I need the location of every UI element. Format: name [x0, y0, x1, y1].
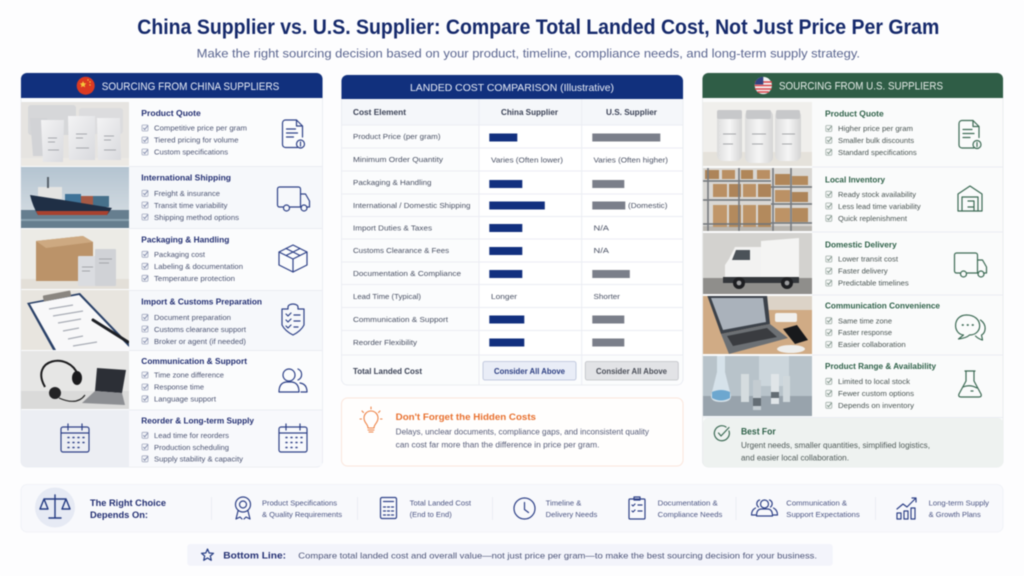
factor: timeline: Timeline &: [546, 498, 582, 508]
photo: laptop on desk: [702, 295, 813, 355]
checklist: range: [826, 377, 914, 410]
heading: right choice: The Right Choice: [90, 498, 166, 508]
factor: timeline: [514, 498, 598, 519]
row: product range and availability: [703, 356, 981, 416]
checklist: product quote: [142, 124, 247, 156]
checklist: inventory: Less lead time variability: [838, 202, 921, 211]
panel: the right choice depends on: [21, 484, 1003, 532]
row: packaging and handling: [21, 229, 307, 289]
heading: Communication Convenience: Communication Convenience: [825, 300, 940, 310]
table column headers: U.S. Supplier: [606, 108, 657, 117]
heading: Product Quote: Product Quote: [825, 108, 884, 118]
row: local inventory: [703, 168, 982, 231]
checklist: communication: Time zone difference: [154, 371, 224, 380]
checklist: communication: [142, 371, 224, 404]
row: international shipping: [21, 167, 310, 228]
table row labels: Packaging & Handling: [353, 178, 432, 187]
icon: calendar: [279, 424, 307, 452]
photo: box and pouches: [20, 229, 130, 290]
row: communication convenience: [703, 295, 985, 354]
total landed cost row: Consider All Above: [596, 367, 668, 376]
checklist: product quote: Custom specifications: [154, 148, 228, 156]
total landed cost row: Consider All Above: [494, 367, 566, 376]
heading: table title: LANDED COST COMPARISON (Illustrative): [410, 83, 614, 94]
text: bottom line message: Compare total landed cost and overall value—not just price per gram—to make the best sourcing decision for your business.: [298, 550, 817, 560]
row: product quote: [21, 102, 304, 166]
photo: laboratory vials: [702, 356, 812, 416]
callout: best for: [714, 426, 930, 462]
icon: delivery truck: [954, 253, 986, 277]
factor: long-term supply: Long-term Supply: [929, 498, 989, 508]
factor: timeline: Delivery Needs: [546, 510, 598, 519]
heading: right choice: Depends On:: [90, 510, 148, 520]
factor: communication: Communication &: [786, 498, 847, 508]
checklist: U.S. product quote: Smaller bulk discounts: [838, 136, 914, 145]
checklist: packaging: Temperature protection: [154, 274, 235, 283]
checklist: U.S. product quote: Standard specifications: [838, 148, 917, 157]
checklist: delivery: Predictable timelines: [838, 279, 909, 288]
U.S. supplier column bars and values: Varies (Often higher): [594, 156, 668, 164]
checklist: U.S. product quote: Higher price per gram: [838, 124, 913, 133]
checklist: reorder: Supply stability & capacity: [154, 454, 243, 464]
checklist: customs: [142, 313, 247, 346]
checklist: packaging: Labeling & documentation: [154, 262, 243, 271]
factor: long-term supply: [897, 498, 989, 519]
row: U.S. product quote: [703, 102, 981, 166]
factor: product specifications: Product Specifications: [262, 498, 337, 508]
heading: Reorder & Long-term Supply: Reorder & Long-term Supply: [141, 416, 254, 426]
row: communication and support: [21, 351, 307, 409]
icon: checklist shield: [282, 304, 304, 335]
checklist: convenience: Same time zone: [838, 316, 892, 325]
title: China Supplier vs. U.S. Supplier: Compare Total Landed Cost, Not Just Price Per Gram: [137, 15, 939, 39]
table row labels: Minimum Order Quantity: [353, 155, 443, 164]
checklist: product quote: Tiered pricing for volume: [154, 136, 238, 144]
checklist: delivery: Lower transit cost: [838, 255, 899, 264]
icon: delivery truck: [278, 187, 310, 211]
table column headers: [353, 108, 657, 117]
photo: headset and laptop: [20, 351, 130, 410]
heading: Communication & Support: Communication & Support: [141, 356, 247, 366]
factor: communication: Support Expectations: [786, 510, 860, 519]
checklist: shipping: [142, 189, 239, 222]
table column headers: China Supplier: [501, 108, 558, 117]
heading: Product Range & Availability: Product Range & Availability: [825, 361, 936, 371]
icon: warehouse house: [958, 186, 982, 211]
heading: Product Quote: Product Quote: [141, 108, 201, 118]
factor: documentation: Compliance Needs: [658, 510, 723, 519]
factor: long-term supply: & Growth Plans: [929, 510, 981, 519]
table row labels: Reorder Flexibility: [353, 338, 417, 347]
heading: Best For: Best For: [741, 427, 776, 437]
U.S. supplier column bars and values: N/A: [594, 224, 610, 233]
icon: star: [202, 549, 214, 560]
photo: powder bags: [21, 102, 130, 166]
table row labels: Communication & Support: [353, 315, 449, 324]
heading: International Shipping: International Shipping: [141, 173, 231, 183]
heading: right choice: [90, 498, 166, 520]
icon: quote document: [282, 120, 304, 148]
heading: Local Inventory: Local Inventory: [825, 174, 885, 184]
checklist: customs: Document preparation: [154, 313, 231, 322]
checklist: delivery: Faster delivery: [838, 267, 888, 276]
text: best for body: Urgent needs, smaller quantities, simplified logistics,: [741, 441, 930, 450]
factor: documentation: Documentation &: [658, 498, 718, 508]
heading: Domestic Delivery: Domestic Delivery: [825, 239, 897, 249]
total landed cost row: [353, 362, 678, 380]
panel: landed cost comparison table: [342, 75, 683, 385]
row: domestic delivery: [703, 233, 986, 294]
icon: people: [279, 369, 307, 392]
checklist: shipping: Transit time variability: [154, 201, 228, 210]
table row labels: International / Domestic Shipping: [353, 201, 470, 210]
icon: package box: [279, 245, 307, 272]
factor: total landed cost: [380, 498, 471, 519]
table column headers: Cost Element: [353, 108, 406, 117]
text: hidden costs body: Delays, unclear documents, compliance gaps, and inconsistent quality: [396, 427, 649, 436]
icon: light bulb: [360, 407, 382, 432]
factor: product specifications: & Quality Requirements: [262, 510, 342, 519]
checklist: range: Fewer custom options: [838, 389, 914, 398]
U.S. supplier column bars and values: N/A: [594, 246, 610, 255]
factor: communication: [752, 498, 860, 519]
heading: table title: [342, 75, 683, 99]
checklist: convenience: Faster response: [838, 328, 892, 337]
checklist: inventory: Quick replenishment: [838, 214, 908, 223]
row: import and customs preparation: [21, 290, 304, 350]
table row labels: [353, 132, 470, 347]
checklist: U.S. product quote: [826, 124, 917, 157]
China supplier column bars and values: Longer: [491, 292, 517, 301]
checklist: communication: Response time: [154, 383, 204, 392]
U.S. supplier column bars and values: (Domestic): [628, 201, 668, 210]
icon: flask: [959, 371, 981, 397]
text: hidden costs body: [396, 427, 649, 449]
text: hidden costs body: can cost far more than the difference in price per gram.: [396, 440, 600, 449]
heading: Packaging & Handling: Packaging & Handling: [141, 234, 229, 244]
checklist: range: Limited to local stock: [838, 377, 910, 386]
checklist: shipping: Freight & insurance: [154, 189, 220, 198]
table row labels: Documentation & Compliance: [353, 269, 461, 278]
callout: hidden costs: [342, 398, 683, 466]
China supplier column bars and values: Varies (Often lower): [491, 156, 563, 164]
checklist: convenience: [826, 316, 906, 349]
icon: scales of justice: [35, 488, 75, 528]
icon: check circle: [714, 426, 729, 441]
panel: sourcing from China suppliers: [21, 73, 322, 467]
total landed cost row: Total Landed Cost: [353, 367, 422, 376]
U.S. supplier column bars and values: Shorter: [594, 292, 620, 301]
subtitle: Make the right sourcing decision based on your product, timeline, compliance needs, and long-term supply strategy.: [197, 46, 860, 60]
callout: bottom line: [187, 544, 833, 566]
tile: calendar thumbnail: [21, 410, 129, 467]
photo: delivery truck: [702, 232, 813, 295]
factor: total landed cost: Total Landed Cost: [410, 498, 471, 508]
checklist: delivery: [826, 255, 909, 288]
checklist: packaging: Packaging cost: [154, 250, 206, 259]
heading: hidden costs: Don't Forget the Hidden Costs: [396, 411, 536, 422]
checklist: product quote: Competitive price per gram: [154, 124, 247, 132]
table row labels: Import Duties & Taxes: [353, 224, 432, 233]
panel: sourcing from U.S. suppliers: [702, 73, 1003, 467]
icon: quote document: [959, 120, 981, 148]
checklist: reorder: Production scheduling: [154, 443, 229, 452]
checklist: shipping: Shipping method options: [154, 213, 239, 222]
heading: U.S. panel: [702, 73, 1003, 98]
checklist: reorder: [142, 431, 243, 464]
checklist: inventory: [826, 190, 921, 223]
heading: U.S. panel: SOURCING FROM U.S. SUPPLIERS: [779, 80, 943, 92]
checklist: packaging: [142, 250, 243, 283]
checklist: reorder: Lead time for reorders: [154, 431, 229, 440]
China supplier column bars and values: [489, 134, 563, 346]
checklist: customs: Broker or agent (if needed): [154, 337, 246, 346]
heading: China panel: SOURCING FROM CHINA SUPPLIERS: [102, 81, 279, 93]
factor: product specifications: [236, 497, 342, 519]
checklist: customs: Customs clearance support: [154, 325, 247, 334]
photo: clipboard and pen: [21, 290, 130, 351]
checklist: range: Depends on inventory: [838, 401, 914, 410]
table row labels: Product Price (per gram): [353, 132, 441, 141]
photo: white bottles: [702, 102, 812, 166]
text: bottom line label: Bottom Line:: [223, 550, 286, 561]
factor: documentation: [629, 497, 723, 519]
checklist: inventory: Ready stock availability: [838, 190, 916, 199]
U.S. supplier column bars and values: [592, 134, 668, 346]
icon: chat bubbles: [956, 315, 985, 340]
text: best for body: and easier local collaboration.: [741, 453, 849, 462]
heading: Import & Customs Preparation: Import & Customs Preparation: [141, 297, 262, 307]
heading: China panel: [21, 73, 322, 98]
checklist: convenience: Easier collaboration: [838, 340, 906, 349]
row: reorder and long-term supply: [21, 410, 307, 467]
icon: U.S. flag: [755, 77, 772, 94]
table row labels: Lead Time (Typical): [353, 292, 421, 301]
checklist: communication: Language support: [154, 394, 217, 404]
photo: container ship: [20, 166, 130, 229]
table row labels: Customs Clearance & Fees: [353, 246, 449, 255]
icon: China flag: [77, 77, 95, 95]
photo: warehouse shelves: [702, 167, 813, 232]
factor: total landed cost: (End to End): [410, 510, 452, 519]
text: best for body: [741, 441, 930, 462]
